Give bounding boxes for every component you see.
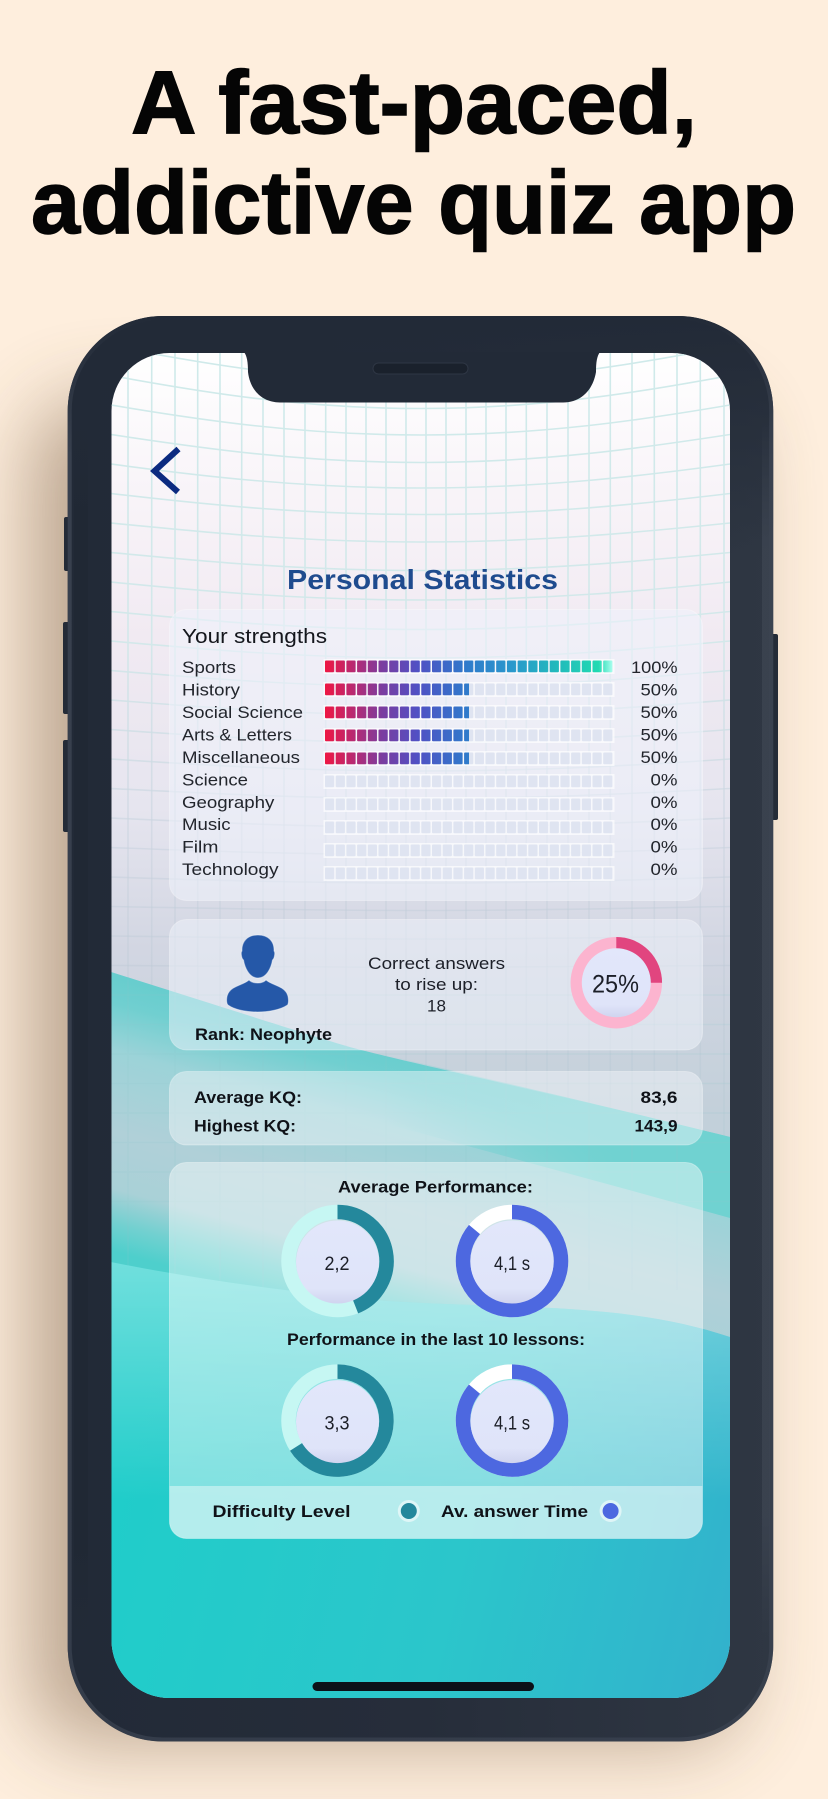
second teal wave bbox=[111, 1262, 730, 1698]
category labels: Arts & Letters bbox=[182, 726, 292, 744]
legend: average answer time: Av. answer Time bbox=[441, 1502, 588, 1521]
donut: recent difficulty 3,3 bbox=[288, 1372, 386, 1470]
panel: performance bbox=[170, 1162, 702, 1538]
percentage labels: 50% bbox=[640, 682, 678, 700]
category labels: Music bbox=[182, 816, 231, 834]
donut: average answer time 4,1 s: 4,1 s bbox=[494, 1254, 530, 1275]
correct answers text: Correct answers bbox=[368, 954, 505, 973]
legend band background bbox=[170, 1486, 702, 1538]
phone side buttons bbox=[63, 517, 778, 832]
percentage labels bbox=[631, 659, 678, 879]
rank label: Rank: Neophyte bbox=[195, 1025, 332, 1044]
panel: KQ scores: Highest KQ: bbox=[194, 1116, 296, 1136]
percentage labels: 100% bbox=[631, 659, 678, 677]
curved grid bbox=[112, 353, 730, 974]
category labels bbox=[182, 659, 303, 879]
donut: average answer time 4,1 s bbox=[463, 1212, 561, 1310]
legend: difficulty level: Difficulty Level bbox=[212, 1502, 350, 1521]
screen heading: Personal Statistics bbox=[287, 564, 558, 595]
notch bbox=[244, 352, 600, 402]
title bbox=[31, 52, 796, 252]
panel: your strengths bbox=[170, 610, 702, 900]
bar fills bbox=[325, 660, 613, 765]
category labels: Film bbox=[182, 838, 218, 856]
percentage labels: 0% bbox=[650, 772, 678, 790]
heading: average performance: Average Performance: bbox=[338, 1178, 533, 1196]
icon: user silhouette bbox=[227, 935, 288, 1012]
percentage labels: 0% bbox=[650, 816, 678, 834]
notch speaker bbox=[373, 363, 468, 374]
panel: KQ scores bbox=[170, 1072, 702, 1145]
percentage labels: 50% bbox=[640, 704, 678, 722]
percentage labels: 0% bbox=[650, 794, 678, 812]
heading: last 10 lessons: Performance in the last 10 lessons: bbox=[287, 1330, 585, 1349]
panel: KQ scores: 143,9 bbox=[634, 1116, 678, 1136]
percentage labels: 50% bbox=[640, 749, 678, 767]
category labels: Miscellaneous bbox=[182, 749, 300, 767]
donut: 25%: 25% bbox=[592, 970, 639, 998]
donut: average difficulty 2,2 bbox=[288, 1212, 387, 1310]
title: A fast-paced, bbox=[131, 52, 697, 152]
phone drop shadow bbox=[30, 400, 740, 1742]
panel: KQ scores: Average KQ: bbox=[194, 1088, 302, 1107]
category labels: Technology bbox=[182, 861, 279, 879]
donut: recent answer time 4,1 s bbox=[463, 1372, 561, 1470]
home indicator bbox=[312, 1682, 534, 1691]
correct answers text: to rise up: bbox=[395, 975, 478, 994]
percentage labels: 0% bbox=[650, 838, 678, 856]
first teal wave bbox=[111, 972, 730, 1698]
panel: KQ scores: 83,6 bbox=[640, 1088, 678, 1107]
donut: recent answer time 4,1 s: 4,1 s bbox=[494, 1414, 530, 1434]
legend: difficulty level bbox=[212, 1500, 420, 1522]
category labels: Sports bbox=[182, 659, 236, 677]
category labels: Science bbox=[182, 772, 248, 790]
category labels: History bbox=[182, 682, 241, 700]
percentage labels: 50% bbox=[640, 726, 678, 744]
phone body bbox=[68, 316, 773, 1742]
phone screen bbox=[111, 346, 731, 1699]
panel heading: Your strengths bbox=[182, 626, 327, 648]
screen background gradient bbox=[111, 353, 731, 1699]
faint grid over the wave bbox=[128, 994, 730, 1265]
correct answers text bbox=[368, 954, 505, 1016]
second wave light overlay bbox=[112, 1262, 730, 1475]
category labels: Social Science bbox=[182, 704, 303, 722]
percentage labels: 0% bbox=[650, 861, 678, 879]
icon: back chevron bbox=[154, 449, 178, 492]
legend: average answer time bbox=[441, 1500, 622, 1522]
donut: recent difficulty 3,3: 3,3 bbox=[324, 1414, 350, 1434]
category labels: Geography bbox=[182, 794, 275, 812]
donut: 25% bbox=[576, 943, 656, 1023]
donut: average difficulty 2,2: 2,2 bbox=[324, 1254, 350, 1275]
bar tracks bbox=[324, 655, 614, 885]
correct answers text: 18 bbox=[427, 996, 446, 1016]
title: addictive quiz app bbox=[31, 152, 796, 252]
teal band on right of first wave bbox=[404, 1060, 730, 1218]
panel: rank bbox=[170, 920, 702, 1050]
